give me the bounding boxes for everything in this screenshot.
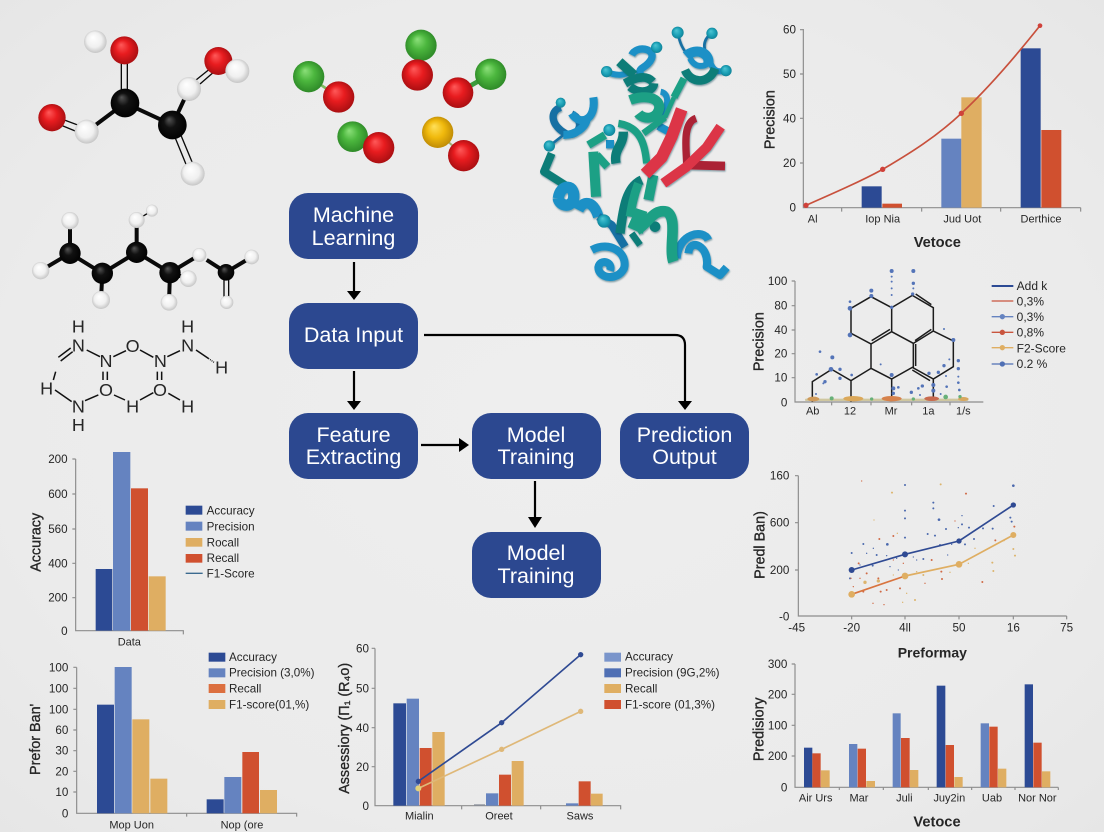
chart: lower left grouped bars: 0 (62, 807, 69, 820)
chart: top right bars with curve: Al (808, 214, 818, 226)
flow box: Model Training lower: Model (507, 541, 565, 565)
flow box: Machine Learning: Learning (312, 226, 395, 250)
chart: bottom middle bars with lines: Saws (567, 810, 594, 822)
scatter points (849, 484, 1015, 579)
chart: scatter with trend lines: 600 (770, 517, 790, 530)
chart: top right bars with curve: 40 (783, 112, 797, 125)
chart: left bars Data: 200 (48, 592, 68, 605)
chart: scatter with trend lines: 50 (953, 622, 966, 635)
chart: scatter with trend lines: 160 (770, 470, 790, 483)
chart: bottom right grouped bars: 300 (768, 658, 788, 671)
chart: top right bars with curve: 20 (783, 157, 797, 170)
chart: bottom right grouped bars: Air Urs (799, 793, 833, 805)
flow box: Model Training: Model (507, 423, 565, 447)
blue helices (544, 33, 727, 277)
chart: scatter with trend lines: 200 (770, 564, 790, 577)
y axis title: Precision (751, 312, 767, 371)
chart: left bars Data: 200 (48, 453, 68, 466)
chart: bottom middle bars with lines: 40 (356, 722, 370, 735)
chart: left bars Data (29, 452, 255, 649)
chart: left bars Data: 600 (48, 488, 68, 501)
chart: scatter with hexagonal overlay: Mr (885, 406, 898, 418)
chart: lower left grouped bars: Mop Uon (109, 819, 154, 831)
molecule: skeletal formula: H (72, 317, 85, 337)
chart: scatter with hexagonal overlay: 12 (844, 406, 856, 418)
legend: 0.2 % (1017, 357, 1048, 371)
chart: scatter with trend lines (752, 470, 1073, 661)
flow box: Feature Extracting (289, 413, 418, 479)
flowchart: machine learning pipeline (289, 193, 749, 598)
y axis title: Precision (763, 90, 779, 149)
flow box: Model Training: Training (498, 445, 574, 469)
trend line: tan (848, 532, 1016, 598)
legend: Precision (207, 520, 255, 533)
chart: left bars Data: Data (118, 637, 142, 649)
legend (186, 504, 255, 581)
chart: scatter with hexagonal overlay: 80 (774, 300, 788, 313)
chart: bottom right grouped bars: 100 (768, 719, 788, 732)
flow box: Machine Learning: Machine (313, 203, 394, 227)
chart: bottom middle bars with lines: Mialin (405, 810, 434, 822)
legend: Accuracy (207, 504, 255, 517)
arrow: Data Input to Feature Extracting (347, 371, 361, 410)
flow box: Machine Learning (289, 193, 418, 259)
chart: bottom right grouped bars: Uab (982, 793, 1002, 805)
x axis title: Preformay (898, 645, 967, 661)
legend (992, 279, 1066, 371)
chart: bottom middle bars with lines: Oreet (485, 810, 513, 822)
bars (862, 48, 1061, 208)
chart: lower left grouped bars (28, 651, 315, 831)
flow box: Feature Extracting: Feature (316, 423, 391, 447)
arrow: Model Training down (528, 481, 542, 528)
chart: lower left grouped bars: 30 (55, 745, 69, 758)
molecule: skeletal formula: O (153, 380, 167, 400)
chart: lower left grouped bars: 60 (55, 724, 69, 737)
chart: scatter with hexagonal overlay (751, 269, 1066, 418)
chart: bottom right grouped bars: 200 (768, 750, 788, 763)
chart: scatter with hexagonal overlay: Ab (806, 406, 819, 418)
legend (604, 650, 720, 711)
chart: lower left grouped bars: 100 (49, 661, 69, 674)
molecule: skeletal formula: N (99, 351, 112, 371)
legend (209, 651, 315, 712)
flow box: Data Input (289, 303, 418, 369)
flow box: Prediction Output: Prediction (637, 423, 732, 447)
trend line: navy (849, 502, 1016, 573)
legend: Recall (625, 682, 657, 695)
flow box: Data Input: Data Input (304, 323, 403, 347)
scatter points (815, 269, 961, 396)
chart: top right bars with curve: 60 (783, 24, 797, 37)
legend: Add k (1017, 279, 1048, 293)
hexagon molecule overlay (812, 294, 953, 402)
molecule: hydrocarbon chain (32, 205, 259, 311)
chart: bottom middle bars with lines (337, 643, 720, 822)
chart: scatter with hexagonal overlay: 100 (768, 275, 788, 288)
chart: scatter with trend lines: -0 (779, 610, 790, 623)
chart: top right bars with curve: Derthice (1021, 214, 1061, 226)
chart: bottom right grouped bars: Nor Nor (1018, 793, 1057, 805)
molecule group: ball-and-stick and skeletal structures (32, 30, 259, 435)
chart: scatter with hexagonal overlay: 40 (774, 324, 788, 337)
flow box: Model Training (472, 413, 601, 479)
molecule: skeletal formula: N (72, 335, 85, 355)
chart: bottom right grouped bars (751, 658, 1058, 831)
molecule: skeletal formula: H (215, 357, 228, 377)
y axis title: Assessiory (Π₁ (R₄o) (337, 663, 353, 794)
chart: top right bars with curve: 0 (790, 202, 797, 215)
legend: F1-Score (207, 568, 255, 581)
chart: bottom right grouped bars: Mar (850, 793, 869, 805)
x axis title: Vetoce (913, 815, 961, 831)
chart: scatter with hexagonal overlay: 10 (774, 372, 788, 385)
y axis title: Predisiory (751, 697, 767, 761)
legend: Recall (229, 682, 261, 695)
molecule: skeletal formula: H (181, 317, 194, 337)
molecule: skeletal formula: H (181, 397, 194, 417)
legend: Accuracy (229, 651, 277, 664)
legend: Recall (207, 552, 239, 565)
x axis title: Vetoce (914, 235, 961, 251)
bars (804, 684, 1050, 787)
chart: scatter with trend lines: 4ll (899, 622, 911, 635)
line: navy series (416, 652, 583, 784)
chart: left bars Data: 0 (61, 625, 68, 638)
molecule: ball-and-stick with oxygen atoms (38, 30, 249, 186)
red beta sheets (645, 109, 725, 183)
flow box: Model Training lower (472, 532, 601, 598)
line: tan series (415, 709, 583, 791)
flow box: Prediction Output (620, 413, 749, 479)
chart: lower left grouped bars: 100 (49, 703, 69, 716)
bars (96, 452, 166, 631)
chart: bottom middle bars with lines: 60 (356, 643, 370, 656)
legend: F1-score(01,%) (229, 699, 309, 712)
flow box: Model Training lower: Training (498, 564, 574, 588)
chart: top right bars with curve: 50 (783, 68, 797, 81)
legend: 0,8% (1017, 325, 1044, 339)
arrow: Machine Learning to Data Input (347, 262, 361, 300)
molecule: skeletal formula: H (40, 379, 53, 399)
molecule: skeletal formula: N (181, 335, 194, 355)
trend curve (803, 23, 1042, 208)
chart: scatter with trend lines: -45 (788, 622, 805, 635)
molecules: diatomic atom pairs (293, 30, 506, 171)
protein ribbon structure (544, 27, 732, 277)
legend: 0,3% (1017, 294, 1044, 308)
chart: top right bars with curve: Jud Uot (943, 214, 981, 226)
chart: bottom right grouped bars: Juli (896, 793, 913, 805)
chart: bottom middle bars with lines: 20 (356, 761, 370, 774)
flow box: Prediction Output: Output (652, 445, 717, 469)
y axis title: Predl Ban) (752, 511, 768, 579)
molecule: skeletal formula (40, 317, 228, 435)
y axis title: Accuracy (29, 512, 45, 572)
chart: top right bars with curve: Iop Nia (865, 214, 901, 226)
chart: lower left grouped bars: Nop (ore (221, 819, 263, 831)
terminal spheres (544, 27, 732, 228)
chart: scatter with hexagonal overlay: 0 (781, 396, 788, 409)
bars (97, 667, 277, 813)
chart: scatter with hexagonal overlay: 1a (922, 406, 935, 418)
molecule: skeletal formula: N (72, 397, 85, 417)
legend: F2-Score (1017, 341, 1066, 355)
arrow: Data Input to Prediction Output (424, 335, 692, 410)
bars (393, 699, 603, 806)
flow box: Feature Extracting: Extracting (306, 445, 401, 469)
legend: Precision (9G,2%) (625, 666, 720, 679)
chart: scatter with hexagonal overlay: 20 (774, 348, 788, 361)
molecule: skeletal formula: O (99, 380, 113, 400)
chart: bottom right grouped bars: 0 (781, 781, 788, 794)
chart: scatter with trend lines: 16 (1007, 622, 1020, 635)
chart: left bars Data: 560 (48, 523, 68, 536)
chart: scatter with trend lines: -20 (843, 622, 861, 635)
legend: Precision (3,0%) (229, 667, 315, 680)
chart: lower left grouped bars: 20 (55, 765, 69, 778)
y axis title: Prefor Ban' (28, 703, 44, 775)
chart: top right bars with curve (763, 23, 1081, 251)
molecule: skeletal formula: H (72, 415, 85, 435)
legend: Rocall (207, 536, 239, 549)
arrow: Feature Extracting to Model Training (421, 438, 469, 452)
chart: scatter with hexagonal overlay: 1/s (956, 406, 971, 418)
molecule: skeletal formula: H (126, 397, 139, 417)
chart: bottom right grouped bars: 200 (768, 689, 788, 702)
teal ribbons (588, 62, 715, 262)
molecule: skeletal formula: N (154, 351, 167, 371)
chart: lower left grouped bars: 100 (49, 682, 69, 695)
molecule: skeletal formula: O (126, 336, 140, 356)
chart: lower left grouped bars: 10 (55, 786, 69, 799)
chart: left bars Data: 400 (48, 557, 68, 570)
legend: F1-score (01,3%) (625, 698, 715, 711)
baseline point strip (805, 395, 969, 401)
chart: bottom middle bars with lines: 50 (356, 683, 370, 696)
chart: bottom right grouped bars: Juy2in (933, 793, 965, 805)
legend: Accuracy (625, 650, 673, 663)
chart: scatter with trend lines: 75 (1060, 622, 1073, 635)
chart: bottom middle bars with lines: 0 (363, 800, 370, 813)
legend: 0,3% (1017, 310, 1044, 324)
